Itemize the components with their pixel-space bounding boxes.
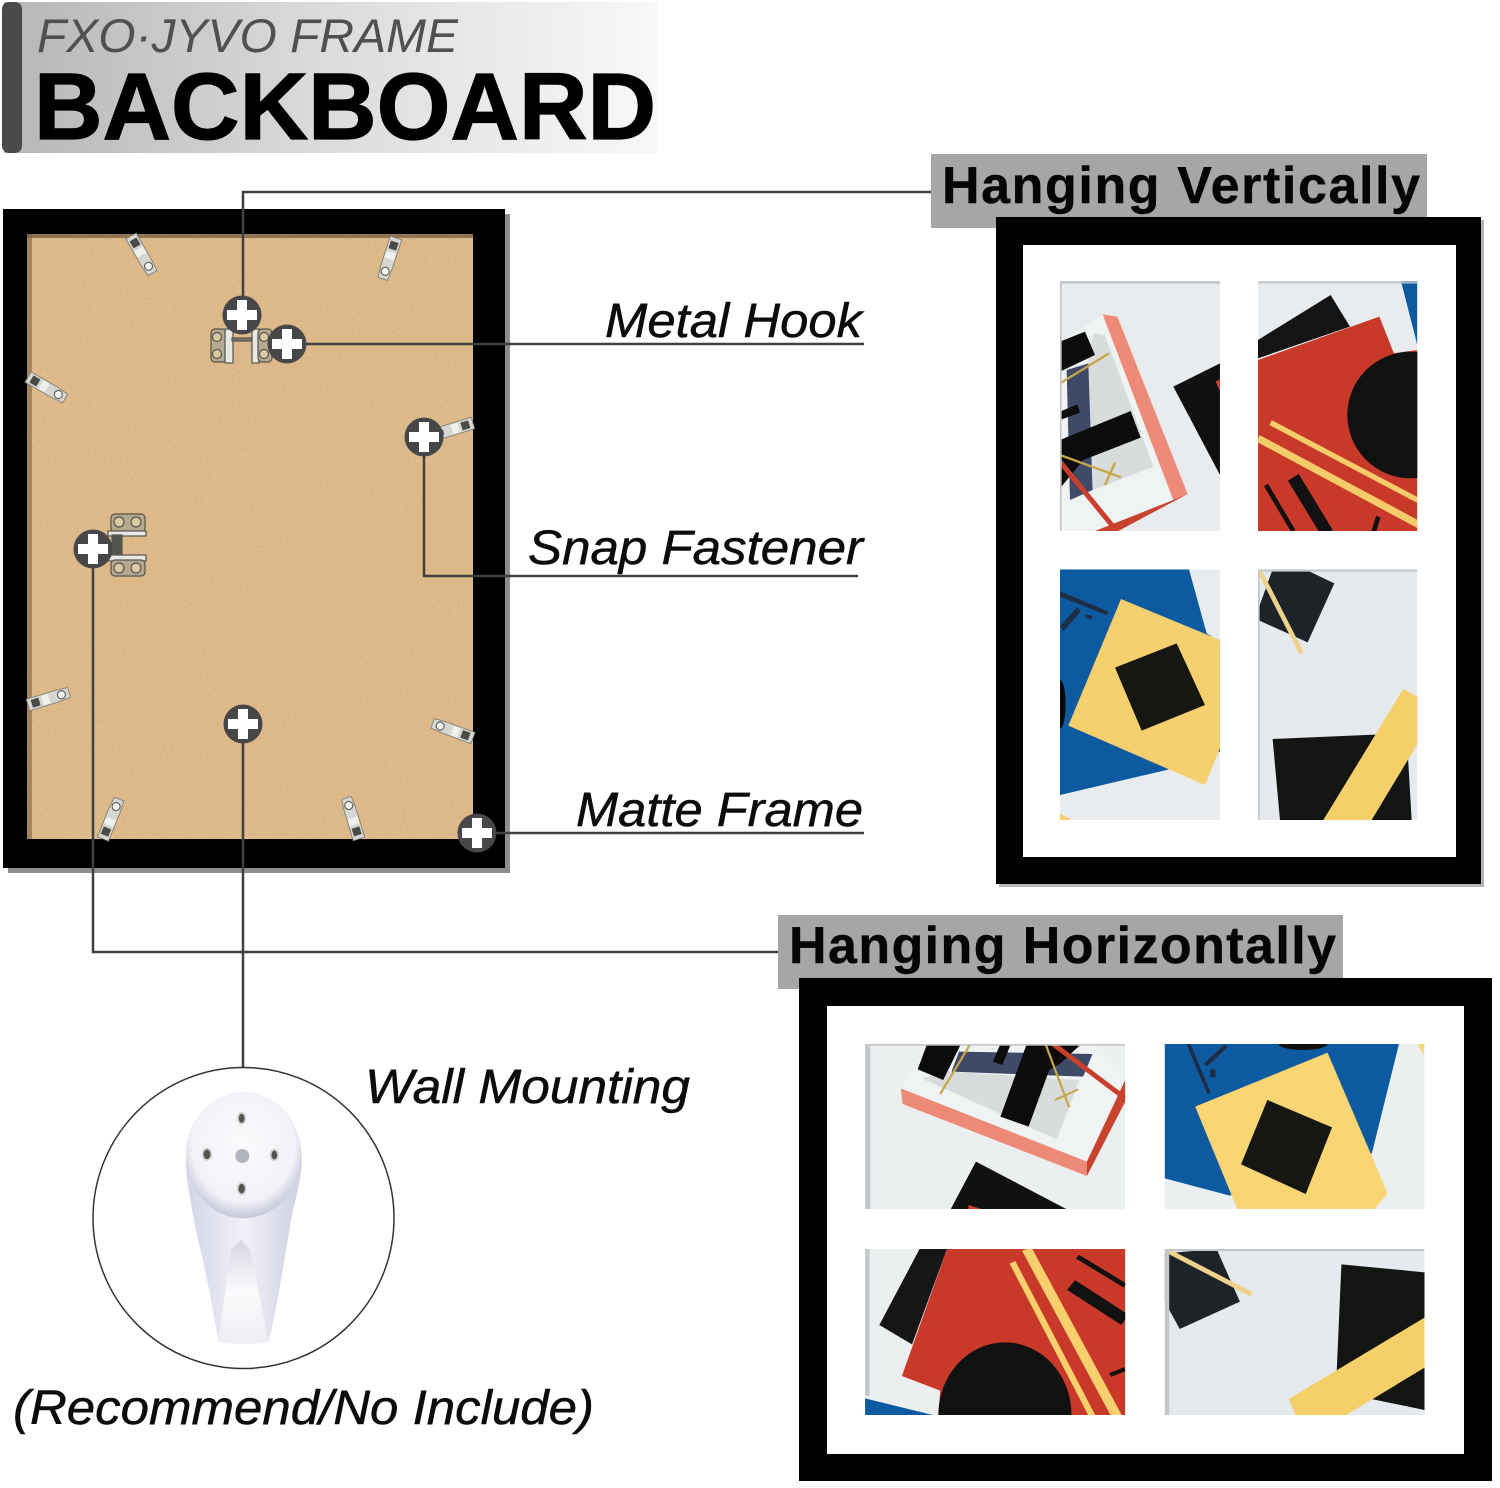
photo panels, bottom row [1054, 569, 1417, 820]
marker: wall mounting top [222, 296, 262, 334]
white matte [827, 1006, 1464, 1454]
banner accent bar [2, 2, 22, 153]
heading: Hanging Vertically: Hanging Vertically [942, 157, 1420, 215]
marker: snap fastener [404, 418, 444, 456]
panel: book artwork [865, 1044, 1125, 1209]
frame [799, 978, 1492, 1481]
label: Metal Hook: Metal Hook [605, 295, 865, 348]
marker: wall mounting [224, 704, 262, 744]
centre hole [235, 1149, 249, 1163]
panel: grey artwork [1258, 569, 1417, 820]
metal hook hardware, top [211, 329, 272, 363]
header banner [2, 2, 658, 160]
hook prong [218, 1240, 268, 1344]
marker: hanging horizontally [74, 530, 112, 568]
white matte [1023, 245, 1456, 857]
wall hook illustration [93, 1068, 394, 1368]
panel: red artwork [865, 1249, 1126, 1415]
kraft backing board [27, 234, 473, 839]
frame shadow [8, 214, 510, 873]
frame [999, 220, 1484, 887]
backboard frame photo [3, 209, 510, 873]
panel: blue artwork [1165, 1038, 1425, 1209]
heading: Hanging Horizontally: Hanging Horizontally [789, 917, 1336, 975]
label: Recommend / No Include: (Recommend/No Include) [13, 1382, 594, 1435]
black frame [3, 209, 505, 868]
banner background [4, 2, 658, 153]
hook body [186, 1092, 302, 1344]
label: Snap Fastener: Snap Fastener [528, 522, 865, 575]
vertical hanging frame [996, 217, 1484, 887]
horizontal hanging frame [799, 978, 1492, 1488]
metal tabs [25, 233, 475, 841]
marker: matte frame [458, 814, 496, 852]
panel: blue artwork [1054, 569, 1220, 820]
circle outline [93, 1068, 394, 1368]
panel: red artwork [1258, 281, 1418, 531]
title: BACKBOARD [34, 54, 656, 160]
photo panels, top row [1060, 281, 1418, 531]
photo panels, top row [865, 1038, 1425, 1209]
label: Wall Mounting: Wall Mounting [365, 1061, 690, 1114]
leader lines [93, 192, 931, 1068]
panel: grey artwork [1165, 1249, 1425, 1415]
photo panels, bottom row [865, 1249, 1424, 1415]
pins [203, 1113, 278, 1194]
panel: book artwork [1060, 281, 1220, 531]
label: Matte Frame: Matte Frame [576, 784, 863, 837]
brand line: FXO·JYVO FRAME [37, 9, 459, 62]
base plate [186, 1092, 301, 1218]
marker: metal hook [268, 324, 306, 364]
snap fastener hardware, left [108, 514, 146, 576]
